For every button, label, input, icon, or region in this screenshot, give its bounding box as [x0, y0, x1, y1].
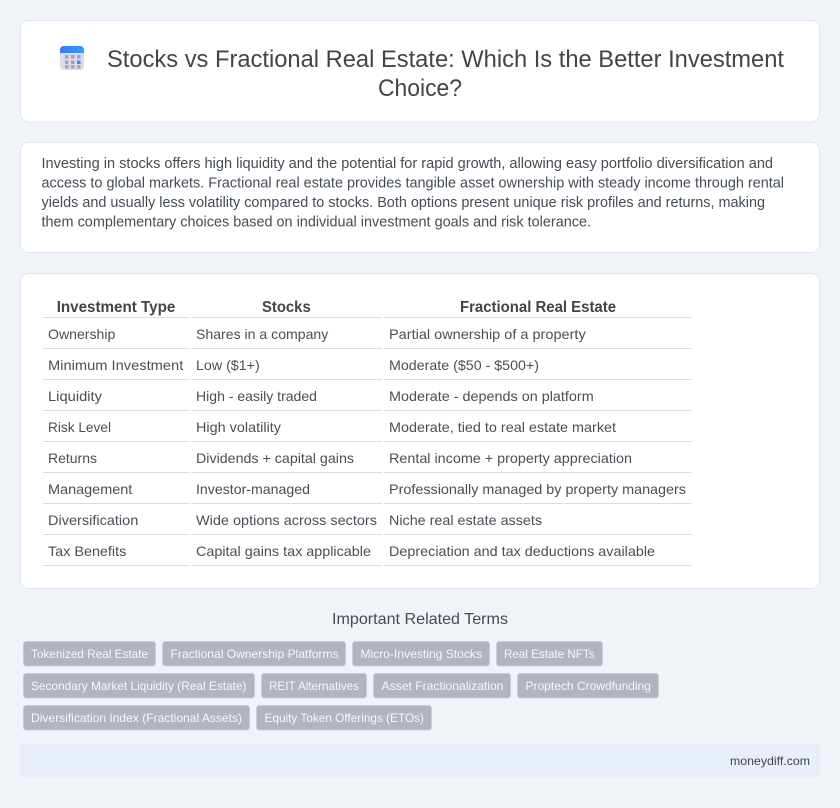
row: returns: Rental income + property appreciation	[389, 450, 632, 466]
footer	[20, 744, 820, 778]
tag: Micro-Investing Stocks	[360, 647, 482, 661]
row: risk level: Risk Level	[48, 419, 111, 435]
panel: header	[20, 20, 820, 122]
text block: introduction: access to global markets. Fractional real estate provides tangible asset ownership with steady income through rental	[42, 176, 784, 192]
row: liquidity	[48, 388, 594, 404]
row: tax benefits	[48, 543, 655, 559]
tag	[518, 674, 658, 698]
tag: Proptech Crowdfunding	[526, 679, 651, 693]
row: management	[48, 481, 686, 497]
table header: Stocks	[262, 299, 311, 316]
heading: related terms: Important Related Terms	[332, 611, 508, 628]
text block: introduction: them complementary choices based on individual investment goals and risk tolerance.	[42, 214, 591, 230]
row: risk level	[48, 419, 616, 435]
tag: Diversification Index (Fractional Assets)	[31, 711, 242, 725]
title: Stocks vs Fractional Real Estate: Which Is the Better Investment	[107, 46, 784, 73]
tag: Asset Fractionalization	[382, 679, 504, 693]
footer: moneydiff.com	[730, 754, 810, 768]
row: returns: Dividends + capital gains	[196, 450, 354, 466]
tag	[24, 674, 254, 698]
row: diversification: Diversification	[48, 512, 138, 528]
row: liquidity: High - easily traded	[196, 388, 317, 404]
row: minimum investment	[48, 357, 539, 373]
panel: introduction	[20, 142, 820, 252]
table header: Fractional Real Estate	[460, 299, 616, 316]
row: minimum investment: Moderate ($50 - $500+)	[389, 357, 539, 373]
row: ownership: Ownership	[48, 326, 116, 342]
tag	[162, 642, 346, 666]
row: ownership: Partial ownership of a property	[389, 326, 586, 342]
tag: Equity Token Offerings (ETOs)	[264, 711, 424, 725]
tag: REIT Alternatives	[269, 679, 359, 693]
tag	[374, 674, 510, 698]
row: diversification: Wide options across sectors	[196, 512, 377, 528]
row: returns: Returns	[48, 450, 97, 466]
row: diversification	[48, 512, 542, 528]
tag	[24, 642, 156, 666]
text block: introduction: yields and usually less volatility compared to stocks. Both options present unique risk profiles and returns, making	[42, 195, 765, 211]
table header	[57, 299, 616, 316]
row: diversification: Niche real estate assets	[389, 512, 542, 528]
row: ownership	[48, 326, 586, 342]
row: minimum investment: Low ($1+)	[196, 357, 260, 373]
tag: Fractional Ownership Platforms	[170, 647, 338, 661]
tag	[496, 642, 602, 666]
related terms tags	[24, 642, 658, 730]
row: returns	[48, 450, 632, 466]
row: management: Management	[48, 481, 132, 497]
tag	[256, 706, 432, 730]
tag	[352, 642, 490, 666]
row: minimum investment: Minimum Investment	[48, 357, 183, 373]
table row lines	[43, 318, 692, 566]
row: management: Investor-managed	[196, 481, 310, 497]
row: risk level: High volatility	[196, 419, 281, 435]
row: tax benefits: Capital gains tax applicable	[196, 543, 371, 559]
tag: Real Estate NFTs	[504, 647, 594, 661]
tag: Secondary Market Liquidity (Real Estate)	[31, 679, 246, 693]
panel: comparison table	[20, 274, 820, 588]
row: liquidity: Moderate - depends on platform	[389, 388, 594, 404]
tag: Tokenized Real Estate	[31, 647, 148, 661]
tag	[24, 706, 250, 730]
row: management: Professionally managed by property managers	[389, 481, 686, 497]
row: risk level: Moderate, tied to real estate market	[389, 419, 616, 435]
row: liquidity: Liquidity	[48, 388, 102, 404]
tag	[262, 674, 366, 698]
title: Choice?	[378, 75, 462, 102]
text block: introduction: Investing in stocks offers high liquidity and the potential for rapid growth, allowing easy portfolio diversification and	[42, 156, 773, 172]
title	[107, 46, 784, 102]
text block: introduction	[42, 156, 784, 230]
table header: Investment Type	[57, 299, 175, 316]
icon: calendar	[60, 46, 84, 70]
row: tax benefits: Depreciation and tax deductions available	[389, 543, 655, 559]
row: tax benefits: Tax Benefits	[48, 543, 126, 559]
row: ownership: Shares in a company	[196, 326, 328, 342]
